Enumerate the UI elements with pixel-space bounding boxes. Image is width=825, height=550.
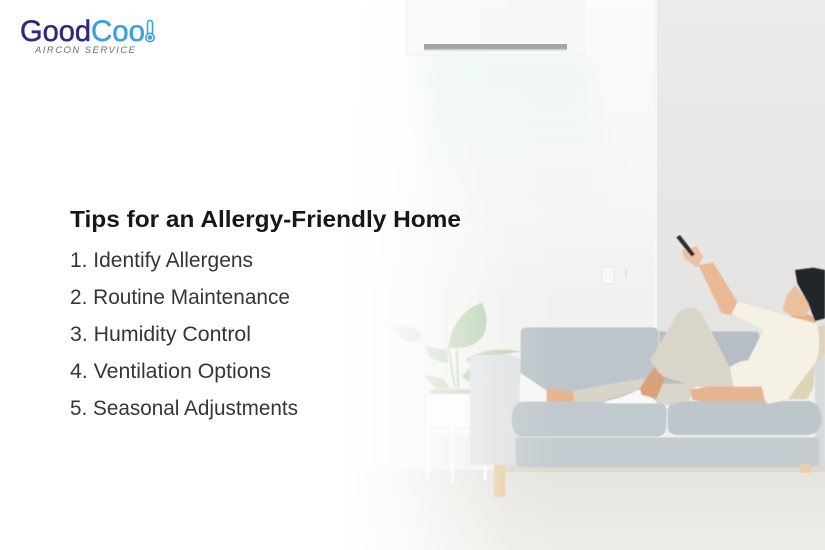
sofa left arm [470,355,522,465]
sofa and man [470,235,825,497]
logo wordmark [20,15,145,48]
wall switch [602,267,627,284]
sofa seat cushions [512,401,822,437]
heading: Tips for an Allergy-Friendly Home [70,206,461,232]
tip 2: 2. Routine Maintenance [70,286,290,309]
tips list [70,249,298,420]
man [547,235,825,405]
sofa base [516,437,819,467]
sofa right arm [815,355,825,465]
air conditioner [406,0,584,56]
potted plant [390,303,522,483]
logo [20,15,154,56]
sofa back cushions [519,327,760,402]
sofa legs [494,464,811,497]
tip 1: 1. Identify Allergens [70,249,253,272]
logo wordmark: Coo [91,15,145,48]
tip 4: 4. Ventilation Options [70,360,271,383]
cool air beam [420,56,640,260]
tip 5: 5. Seasonal Adjustments [70,397,298,420]
icon: thermometer [146,20,154,42]
logo wordmark: Good [20,15,91,48]
tip 3: 3. Humidity Control [70,323,251,346]
logo tagline: AIRCON SERVICE [34,45,136,56]
pillow [788,325,825,399]
room photo background [340,0,825,550]
